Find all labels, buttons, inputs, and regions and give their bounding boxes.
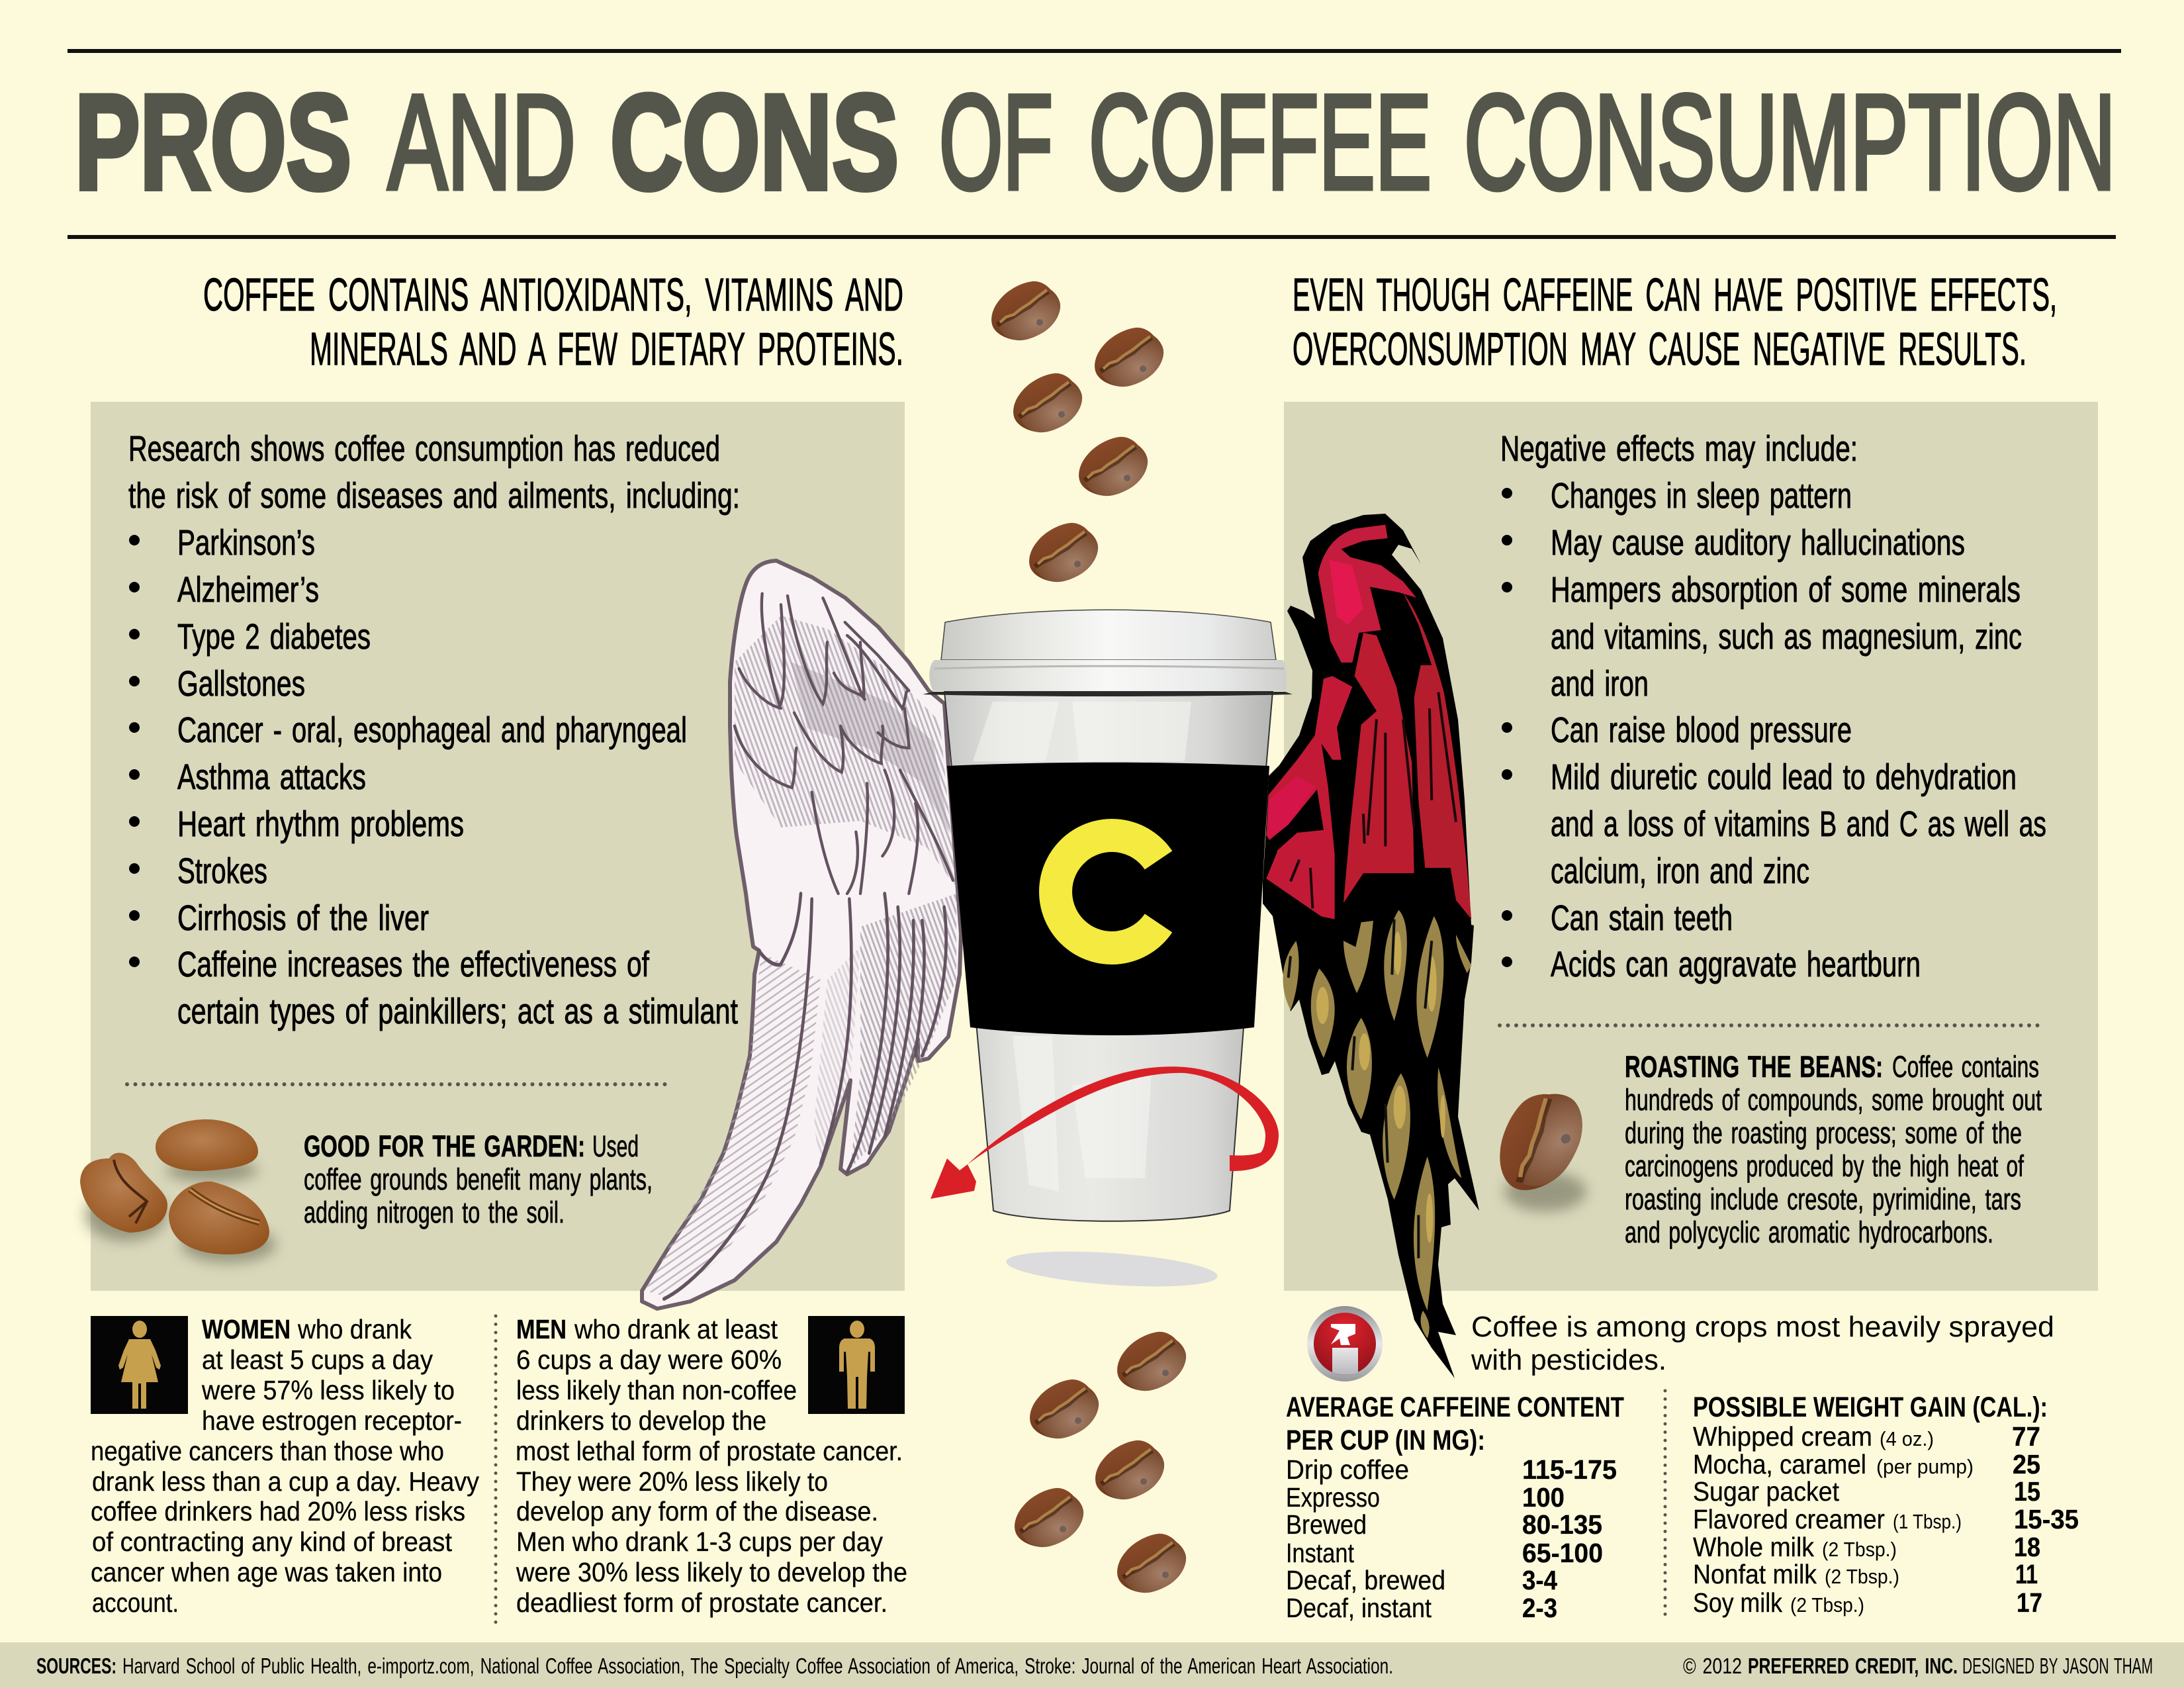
pros list: Type 2 diabetes bbox=[177, 617, 371, 657]
table: average caffeine content: Expresso bbox=[1286, 1482, 1380, 1513]
table: average caffeine content: 115-175 bbox=[1522, 1454, 1617, 1485]
table: average caffeine content: 80-135 bbox=[1522, 1509, 1602, 1540]
table: average caffeine content: Drip coffee bbox=[1286, 1454, 1409, 1485]
cons list: calcium, iron and zinc bbox=[1551, 851, 1809, 891]
icon: man bbox=[808, 1316, 905, 1414]
cup body bbox=[944, 692, 1273, 1221]
left heading: COFFEE CONTAINS ANTIOXIDANTS, VITAMINS AND bbox=[203, 269, 903, 320]
table: average caffeine content: 3-4 bbox=[1522, 1565, 1557, 1595]
callout: roasting the beans: carcinogens produced by the high heat of bbox=[1625, 1149, 2024, 1183]
table: possible weight gain: (1 Tbsp.) bbox=[1893, 1510, 1962, 1533]
pros list bbox=[128, 429, 740, 1031]
title band: AND bbox=[388, 67, 576, 218]
text: men statistic: develop any form of the disease. bbox=[516, 1496, 878, 1526]
pros list: Research shows coffee consumption has reduced bbox=[128, 429, 720, 469]
table: average caffeine content: Instant bbox=[1286, 1538, 1354, 1568]
right heading bbox=[1293, 269, 2057, 375]
callout: good for the garden: Used bbox=[592, 1129, 639, 1163]
callout: good for the garden: adding nitrogen to the soil. bbox=[304, 1196, 565, 1229]
title band: COFFEE bbox=[1089, 67, 1432, 218]
pros list: Alzheimer’s bbox=[177, 570, 319, 610]
callout: roasting the beans: ROASTING THE BEANS: bbox=[1625, 1050, 1883, 1084]
pros list: Cirrhosis of the liver bbox=[177, 898, 429, 938]
falling coffee beans: top bbox=[991, 281, 1163, 582]
table: average caffeine content: PER CUP (IN MG): bbox=[1286, 1425, 1485, 1456]
text: women statistic: coffee drinkers had 20% less risks bbox=[91, 1496, 465, 1526]
cons list bbox=[1500, 429, 2046, 984]
table: possible weight gain: 25 bbox=[2013, 1449, 2040, 1479]
text: women statistic: WOMEN bbox=[202, 1314, 291, 1344]
table: possible weight gain: Flavored creamer bbox=[1693, 1504, 1885, 1534]
pros list: Strokes bbox=[177, 851, 267, 891]
table: average caffeine content: Brewed bbox=[1286, 1509, 1367, 1540]
table: possible weight gain: Nonfat milk bbox=[1693, 1559, 1817, 1589]
text: women statistic: drank less than a cup a day. Heavy bbox=[92, 1466, 479, 1497]
table: average caffeine content: Decaf, instant bbox=[1286, 1593, 1432, 1623]
pros list: Gallstones bbox=[177, 664, 305, 704]
pros list: Asthma attacks bbox=[177, 757, 366, 797]
table: average caffeine content: 65-100 bbox=[1522, 1538, 1603, 1568]
table: possible weight gain: 17 bbox=[2017, 1587, 2042, 1618]
pros list: Caffeine increases the effectiveness of bbox=[177, 945, 650, 984]
table: possible weight gain: 15 bbox=[2014, 1476, 2040, 1507]
text: men statistic: They were 20% less likely to bbox=[516, 1466, 828, 1497]
logo: letter C bbox=[1056, 835, 1158, 948]
text: women statistic: have estrogen receptor- bbox=[202, 1405, 462, 1436]
pros list: certain types of painkillers; act as a stimulant bbox=[177, 992, 738, 1031]
left heading: MINERALS AND A FEW DIETARY PROTEINS. bbox=[310, 323, 903, 375]
text: men statistic: drinkers to develop the bbox=[516, 1405, 766, 1436]
panel: pros bbox=[80, 402, 905, 1291]
cons list: Can stain teeth bbox=[1551, 898, 1733, 938]
left heading bbox=[203, 269, 903, 375]
table: possible weight gain: Whipped cream bbox=[1693, 1421, 1872, 1452]
falling coffee beans: bottom bbox=[1015, 1332, 1186, 1593]
table: possible weight gain: POSSIBLE WEIGHT GAIN (CAL.): bbox=[1693, 1391, 2048, 1423]
footer bar: sources and credit bbox=[0, 1642, 2184, 1688]
cons list: Can raise blood pressure bbox=[1551, 710, 1852, 750]
title band bbox=[68, 49, 2121, 239]
icon: three coffee beans bbox=[80, 1119, 276, 1263]
callout: roasting the beans: Coffee contains bbox=[1892, 1050, 2039, 1084]
pros list: the risk of some diseases and ailments, including: bbox=[128, 476, 740, 516]
devil wing bbox=[1263, 514, 1479, 1378]
pros list: Heart rhythm problems bbox=[177, 804, 464, 844]
text: men statistic: MEN bbox=[516, 1314, 567, 1344]
table: average caffeine content: 100 bbox=[1522, 1482, 1565, 1513]
table: average caffeine content: Decaf, brewed bbox=[1286, 1565, 1445, 1595]
callout: good for the garden: GOOD FOR THE GARDEN: bbox=[304, 1129, 585, 1163]
pros list: Cancer - oral, esophageal and pharyngeal bbox=[177, 710, 687, 750]
pesticide note bbox=[1471, 1311, 2054, 1376]
text: men statistic: less likely than non-coffee bbox=[516, 1375, 797, 1405]
callout: roasting the beans: and polycyclic aromatic hydrocarbons. bbox=[1625, 1215, 1993, 1249]
text: women statistic: account. bbox=[92, 1587, 179, 1618]
pesticide note: Coffee is among crops most heavily sprayed bbox=[1471, 1311, 2054, 1343]
icon: woman bbox=[91, 1316, 188, 1414]
text: women statistic: cancer when age was taken into bbox=[91, 1557, 442, 1587]
cons list: and vitamins, such as magnesium, zinc bbox=[1551, 617, 2022, 657]
text: men statistic: most lethal form of prostate cancer. bbox=[516, 1436, 903, 1466]
table: possible weight gain: Sugar packet bbox=[1693, 1476, 1840, 1507]
cup lid bbox=[923, 610, 1293, 696]
table: possible weight gain: Whole milk bbox=[1693, 1532, 1814, 1562]
callout: roasting the beans bbox=[1625, 1050, 2042, 1249]
title band: CONS bbox=[610, 67, 899, 218]
text: women statistic: were 57% less likely to bbox=[201, 1375, 455, 1405]
footer bar: sources and credit: PREFERRED CREDIT, INC. bbox=[1748, 1654, 1958, 1678]
text: women statistic bbox=[91, 1314, 479, 1618]
pros list: Parkinson’s bbox=[177, 523, 315, 563]
table: possible weight gain: 77 bbox=[2012, 1421, 2040, 1452]
footer bar: sources and credit: SOURCES: bbox=[36, 1654, 116, 1678]
coffee cup bbox=[923, 610, 1293, 1292]
icon: roasted bean bbox=[1475, 1076, 1605, 1211]
table: possible weight gain bbox=[1693, 1391, 2079, 1618]
angel wing bbox=[642, 561, 961, 1309]
table: possible weight gain: Mocha, caramel bbox=[1693, 1449, 1866, 1479]
text: men statistic bbox=[516, 1314, 907, 1618]
cons list: Hampers absorption of some minerals bbox=[1551, 570, 2021, 610]
text: men statistic: Men who drank 1-3 cups per day bbox=[516, 1526, 883, 1557]
callout: roasting the beans: during the roasting process; some of the bbox=[1625, 1116, 2022, 1150]
text: men statistic: deadliest form of prostate cancer. bbox=[516, 1587, 887, 1618]
cons list: Negative effects may include: bbox=[1500, 429, 1858, 469]
table: average caffeine content: 2-3 bbox=[1522, 1593, 1557, 1623]
cons list: Acids can aggravate heartburn bbox=[1551, 945, 1921, 984]
text: men statistic: who drank at least bbox=[574, 1314, 778, 1344]
table: possible weight gain: 11 bbox=[2015, 1559, 2038, 1589]
table: possible weight gain: (2 Tbsp.) bbox=[1790, 1593, 1864, 1617]
footer bar: sources and credit: © 2012 bbox=[1683, 1654, 1742, 1678]
red arrow bbox=[931, 1066, 1279, 1199]
table: possible weight gain: (per pump) bbox=[1876, 1455, 1974, 1478]
footer bar: sources and credit: Harvard School of Public Health, e-importz.com, National Coffee Association, The Specialty Coffee Association of America, Stroke: Journal of the American Heart Association. bbox=[122, 1654, 1393, 1678]
table: average caffeine content: AVERAGE CAFFEINE CONTENT bbox=[1286, 1391, 1624, 1423]
table: possible weight gain: 15-35 bbox=[2014, 1504, 2079, 1534]
panel: cons bbox=[1284, 402, 2098, 1291]
table: possible weight gain: (4 oz.) bbox=[1880, 1427, 1934, 1450]
cons list: May cause auditory hallucinations bbox=[1551, 523, 1965, 563]
table: average caffeine content bbox=[1286, 1391, 1624, 1623]
table: possible weight gain: 18 bbox=[2014, 1532, 2040, 1562]
table: possible weight gain: Soy milk bbox=[1693, 1587, 1782, 1618]
pesticide note: with pesticides. bbox=[1471, 1344, 1666, 1376]
cons list: and iron bbox=[1551, 664, 1649, 704]
title band: OF bbox=[939, 67, 1053, 218]
callout: roasting the beans: roasting include cresote, pyrimidine, tars bbox=[1625, 1182, 2021, 1216]
text: men statistic: 6 cups a day were 60% bbox=[516, 1344, 782, 1375]
table: possible weight gain: (2 Tbsp.) bbox=[1822, 1538, 1897, 1561]
text: women statistic: at least 5 cups a day bbox=[202, 1344, 433, 1375]
title band: PROS bbox=[75, 67, 351, 218]
cup shadow bbox=[1005, 1246, 1218, 1292]
callout: good for the garden: coffee grounds benefit many plants, bbox=[304, 1162, 653, 1196]
icon: pesticide spray badge bbox=[1307, 1306, 1383, 1382]
cup sleeve bbox=[947, 763, 1269, 1035]
text: men statistic: were 30% less likely to develop the bbox=[516, 1557, 907, 1587]
callout: good for the garden bbox=[304, 1129, 653, 1229]
text: women statistic: of contracting any kind of breast bbox=[92, 1526, 453, 1557]
text: women statistic: negative cancers than those who bbox=[91, 1436, 444, 1466]
text: women statistic: who drank bbox=[297, 1314, 412, 1344]
cons list: Changes in sleep pattern bbox=[1551, 476, 1852, 516]
cons list: Mild diuretic could lead to dehydration bbox=[1551, 757, 2017, 797]
table: possible weight gain: (2 Tbsp.) bbox=[1825, 1565, 1899, 1588]
